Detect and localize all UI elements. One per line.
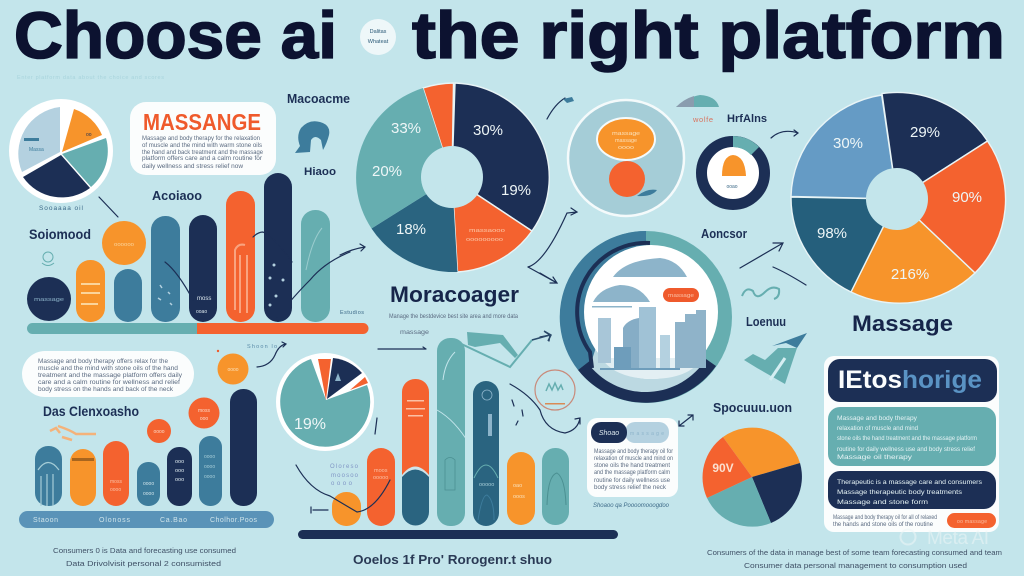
text card: small: stone oils the hand treatment	[594, 463, 670, 469]
labels: top left: Macoacme	[287, 91, 350, 106]
axis pill: bottom left: Staoon	[33, 517, 58, 524]
heading: center: Moracoager	[390, 282, 519, 307]
small card caption: Shoaoo qa Poooomooogdoo	[593, 503, 670, 509]
card footer: the hands and stone oils of the routine	[833, 522, 934, 528]
bar chart: top left: moss	[197, 296, 211, 302]
heading: massage: Massage	[852, 311, 953, 336]
small labels near axis: Estudios	[340, 310, 364, 316]
icon: sketch circle	[535, 370, 575, 410]
bubbles: bottom left: ooo	[200, 416, 208, 422]
pie chart: center donut: 20%	[372, 163, 402, 180]
bubble: navy	[27, 277, 71, 321]
bar chart: bottom left: oooo	[143, 481, 154, 487]
card text: navy: Massage and stone form	[837, 499, 928, 506]
caption: bottom left: Consumers 0 is Data and forecasting use consumed	[53, 546, 236, 555]
scribble arrows: bottom center	[296, 347, 580, 513]
legend text: bottom center: moosoo	[331, 473, 359, 479]
circle: orange and red	[568, 100, 684, 216]
donut icon: ooao	[726, 184, 738, 190]
pie chart: center donut: ooooooooo	[466, 237, 503, 243]
legend text: bottom center: Oloreso	[330, 464, 359, 470]
bar chart: bottom left: ooo	[175, 468, 184, 474]
text card: small: Massage and body therapy oil for	[594, 449, 673, 455]
card text: navy	[828, 471, 996, 509]
bar: dark blue	[473, 381, 499, 526]
text card: massage: of muscle and the mind with warm stone oils	[142, 143, 262, 149]
text card: massage	[130, 102, 276, 175]
big pie chart: right: 216%	[891, 266, 929, 283]
arrows: right	[540, 130, 806, 426]
bubbles: bottom left: oooo	[227, 367, 239, 373]
tag: orange pill: massage	[668, 293, 694, 299]
icon: plane	[744, 333, 807, 384]
pie chart: center donut	[356, 83, 549, 272]
bubbles: bottom left: moss	[198, 408, 210, 414]
labels: top left: Soiomood	[29, 226, 91, 242]
bar: orange: oao	[513, 483, 522, 489]
text pill: bottom left: treatment and the massage platform offers daily	[38, 373, 182, 379]
title	[14, 0, 1005, 72]
labels: right	[701, 227, 786, 329]
big pie chart: right: 30%	[833, 135, 863, 152]
arrow lines: top left	[99, 197, 350, 317]
card text: teal: Massage and body therapy	[837, 415, 918, 422]
skyline illustration	[592, 258, 706, 370]
bar: red: moos	[374, 468, 388, 474]
center caption	[389, 314, 519, 336]
title: Choose ai	[14, 0, 337, 72]
faint subtitle: Enter platform data about the choice and scores	[17, 75, 164, 81]
bar chart: bottom left: ooo	[175, 459, 184, 465]
text card: massage: daily wellness and stress relief now	[142, 164, 244, 170]
text card: massage: MASSANGE	[143, 109, 261, 135]
arrows: center	[340, 97, 577, 283]
circle: orange and red: massage	[615, 138, 637, 144]
legend text: bottom center: oooo	[331, 481, 353, 487]
big pie chart: right: 90%	[952, 189, 982, 206]
labels: right: Aoncsor	[701, 227, 747, 241]
bubble: orange	[102, 221, 146, 265]
card text: navy: Therapeutic is a massage care and consumers	[837, 479, 983, 486]
pie chart: bottom center: 19%	[294, 416, 326, 433]
bar chart: bottom left: oooo	[110, 487, 121, 493]
tag: orange pill	[663, 288, 699, 302]
top right decoration and label: wolfe	[692, 115, 713, 124]
big pie chart: right: 98%	[817, 225, 847, 242]
pie chart: top left	[9, 99, 113, 203]
axis bar: top left	[27, 323, 368, 334]
labels: top left: Hiaoo	[304, 166, 336, 178]
axis bar: bottom center	[298, 530, 618, 539]
axis pill: bottom left: Cholhor.Poos	[210, 517, 258, 524]
bar: orange: ooos	[513, 494, 525, 500]
bar chart: bottom left: oooo	[204, 454, 215, 460]
text card: massage: the hand and back treatment and the massage	[142, 150, 264, 156]
bar chart: bottom left	[35, 389, 257, 506]
icon: title badge: Dalitas	[370, 29, 387, 35]
bubbles: bottom left	[147, 350, 248, 443]
big circle: skyline	[560, 231, 732, 403]
top right decoration and label: HrfAlns	[727, 113, 767, 125]
pie chart: bottom right	[703, 428, 802, 527]
bubble: navy: massage	[34, 297, 64, 303]
text pill: bottom left: care and a calm routine for wellness and relief	[38, 380, 180, 386]
icon: orange squiggle	[50, 426, 96, 440]
caption: bottom right	[707, 548, 1002, 570]
bar chart: bottom left: oooo	[204, 464, 215, 470]
text card: small: relaxation of muscle and mind on	[594, 456, 673, 462]
icon: title badge	[360, 19, 396, 55]
big pie chart: right: 29%	[910, 124, 940, 141]
arrow: bottom left: Shoon lo	[247, 344, 277, 350]
card text: navy: Massage therapeutic body treatments	[837, 489, 963, 496]
axis pill: bottom left	[19, 511, 274, 528]
top right decoration and label	[676, 95, 767, 125]
bar: orange	[507, 452, 535, 525]
donut icon	[702, 136, 764, 204]
watermark: meta ai: Meta AI	[927, 528, 989, 549]
text card: small: body stress relief the neck	[594, 485, 667, 491]
card text: teal: routine for daily wellness use and body stress relief	[837, 446, 975, 453]
card footer	[833, 513, 996, 528]
legend text: bottom center	[330, 464, 359, 487]
bar: red: ooooo	[373, 475, 388, 481]
text pill: bottom left	[22, 351, 194, 397]
circle: orange and red: massage	[612, 131, 640, 137]
card text: teal	[828, 407, 996, 466]
panel: right card	[824, 356, 999, 532]
pie caption: Sooaaaa oil	[39, 205, 84, 212]
pie chart: top left: Massa	[29, 147, 44, 153]
text card: small: massage	[630, 431, 664, 437]
bar chart: bottom left: ooo	[175, 477, 184, 483]
caption: bottom right: Consumers of the data in manage best of some team forecasting consumed and team	[707, 548, 1002, 557]
pie chart: center donut: 30%	[473, 122, 503, 139]
card heading	[828, 359, 997, 402]
title: the right platform	[412, 0, 1005, 72]
text pill: bottom left: muscle and the mind with stone oils of the hand	[38, 366, 178, 372]
caption: bottom left	[53, 546, 236, 568]
text card: small: Shoao	[599, 430, 619, 437]
labels: top left: Acoiaoo	[152, 188, 202, 203]
icon: teal squiggle	[742, 288, 779, 299]
bar chart: top left: ooao	[196, 309, 207, 315]
pie chart: center donut: 18%	[396, 221, 426, 238]
labels: top left	[29, 91, 350, 242]
caption: bottom left: Data Drivolvisit personal 2 consumisted	[66, 559, 221, 568]
bubble: orange: oooooo	[114, 242, 134, 248]
pie chart: center donut: 33%	[391, 120, 421, 137]
bar: teal tall	[437, 338, 470, 526]
axis pill: bottom left: Ca.Bao	[160, 517, 187, 524]
pie chart: bottom center	[276, 353, 374, 451]
pie chart: center donut: massaooo	[469, 228, 505, 234]
bar: teal	[542, 448, 569, 525]
card text: teal: relaxation of muscle and mind	[837, 425, 918, 432]
pie chart: top left: oo	[86, 132, 92, 138]
heading: bottom left: Das Clenxoasho	[43, 403, 139, 419]
teal zigzag arrow	[453, 331, 551, 367]
caption: bottom right: Consumer data personal management to consumption used	[744, 561, 967, 570]
big pie chart: right	[791, 93, 1006, 303]
icon: elephant	[295, 121, 329, 153]
pie chart: center donut: 19%	[501, 182, 531, 199]
bar: red and blue	[402, 379, 429, 526]
text card: massage: platform offers care and a calm routine for	[142, 156, 262, 162]
text pill: bottom left: body stress on the hands and back of the neck	[38, 387, 174, 393]
text card: small: routine for daily wellness use	[594, 478, 671, 484]
bar chart: top left	[27, 173, 330, 322]
labels: right: Loenuu	[746, 315, 786, 329]
card footer: Massage and body therapy oil for all of relaxed	[833, 515, 937, 521]
text card: massage: Massage and body therapy for the relaxation	[142, 136, 260, 142]
bar: dark blue: ooooo	[479, 482, 494, 488]
bar chart: bottom left: oooo	[143, 491, 154, 497]
text card: small	[587, 418, 678, 497]
text pill: bottom left: Massage and body therapy offers relax for the	[38, 359, 169, 365]
bar: orange short	[332, 492, 361, 526]
bubbles: bottom left: oooo	[153, 429, 165, 435]
card heading: IEtoshorige	[838, 366, 982, 394]
bar chart: bottom center	[332, 338, 569, 526]
bar chart: bottom left: oooo	[204, 474, 215, 480]
icon: small sketch	[42, 252, 54, 266]
center caption: massage	[400, 330, 430, 336]
heading: bottom right pie: Spocuuu.uon	[713, 400, 792, 415]
arrow: bottom left	[247, 342, 286, 367]
circle: orange and red: oooo	[618, 145, 634, 151]
center caption: Manage the bestdevice best site area and more data	[389, 314, 519, 320]
caption: bottom center: Ooelos 1f Pro' Rorogenr.t shuo	[353, 552, 552, 567]
icon: title badge: Whateat	[368, 39, 389, 45]
axis pill: bottom left: Olonoss	[99, 517, 130, 524]
pie chart: bottom right: 90V	[712, 461, 734, 475]
text card: small: and the massage platform calm	[594, 470, 670, 476]
card text: teal: Massage oil therapy	[837, 454, 913, 461]
bar: red	[367, 448, 395, 526]
card footer: oo massage	[957, 519, 987, 525]
bar chart: bottom left: moss	[110, 479, 122, 485]
card text: teal: stone oils the hand treatment and the massage platform	[837, 435, 977, 442]
